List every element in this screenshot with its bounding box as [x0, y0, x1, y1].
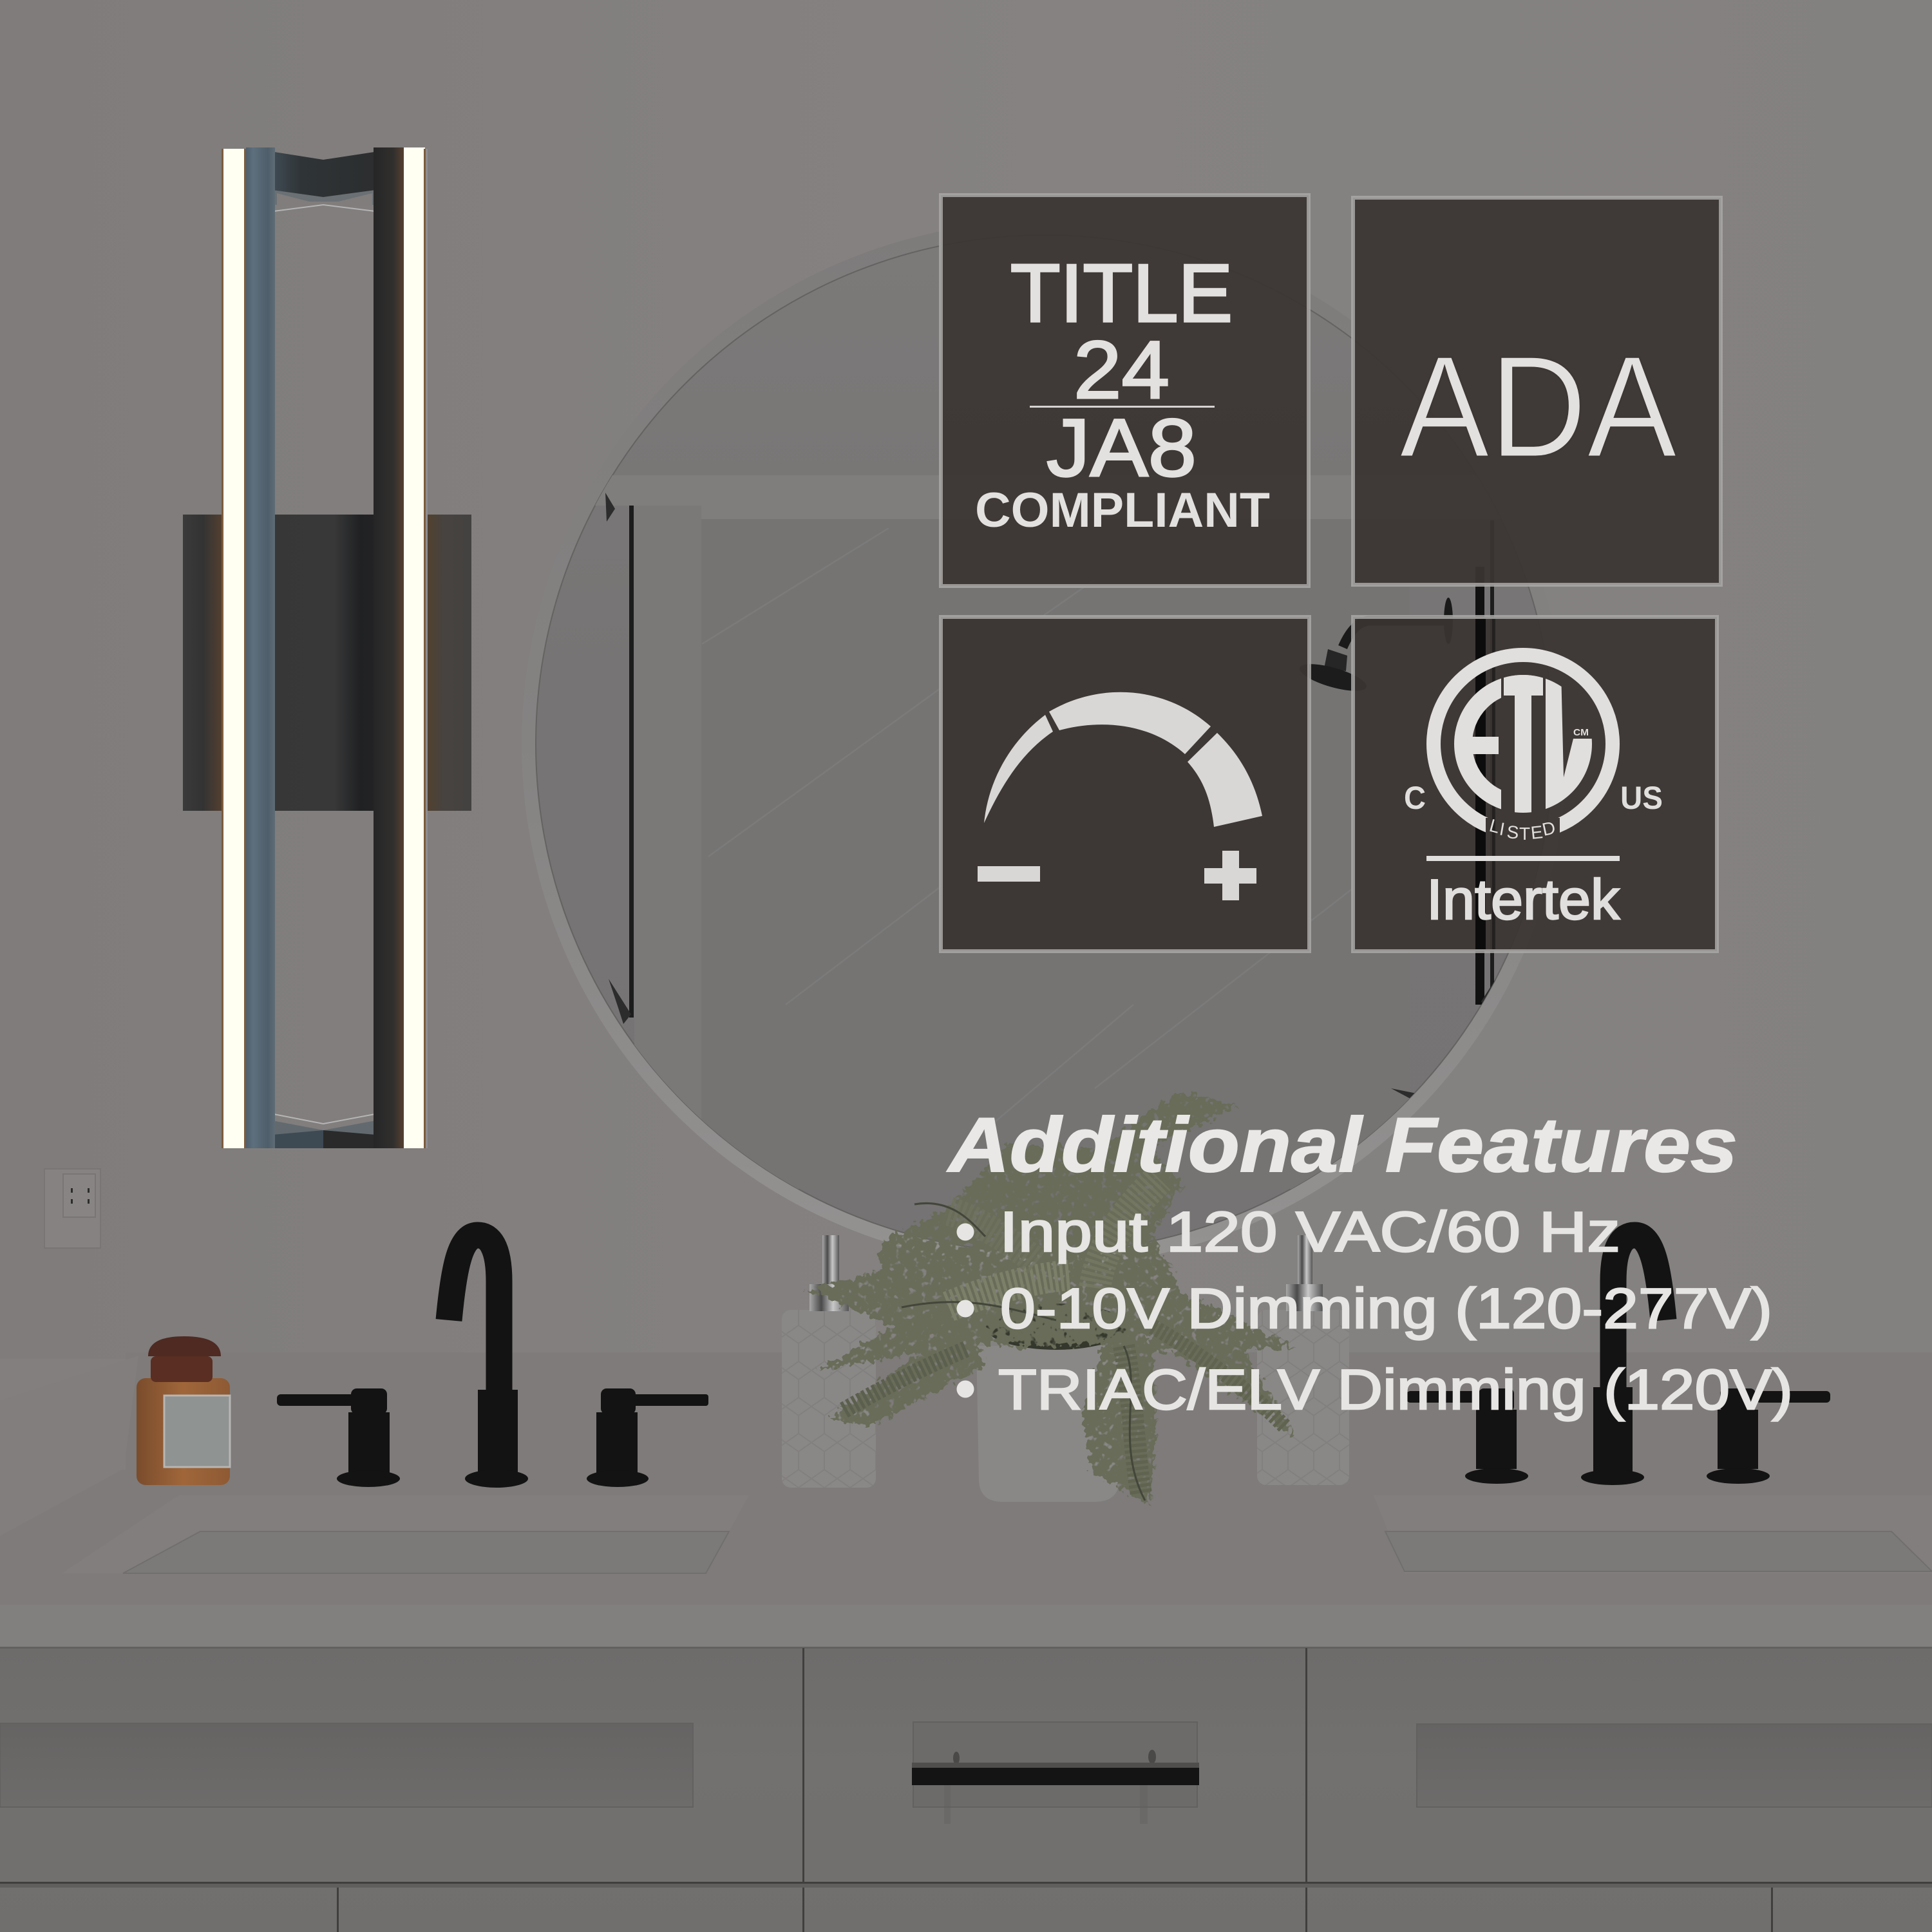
badge: dimmer — [941, 617, 1309, 951]
bullet two — [957, 1300, 974, 1318]
left light strip — [222, 149, 246, 1148]
blue left arm — [246, 147, 275, 1148]
countertop — [0, 1470, 1932, 1649]
LISTED: LISTED — [1487, 815, 1557, 844]
ETL letter T — [1504, 670, 1543, 815]
cabinet fronts — [0, 1648, 1932, 1932]
features list — [957, 1200, 1793, 1421]
ETL letter E — [1454, 679, 1501, 809]
badge: ADA — [1353, 198, 1721, 585]
minus — [978, 866, 1040, 882]
wall sconce product image — [183, 147, 471, 1148]
left return wall of backsplash — [0, 1356, 138, 1536]
plant pot — [976, 1346, 1121, 1502]
fern — [805, 1092, 1294, 1504]
c mark: C — [1404, 780, 1426, 816]
ETL outer ring — [1434, 655, 1613, 833]
soap dispenser right — [1257, 1235, 1349, 1485]
heading: additional features: Additional Features — [947, 1102, 1738, 1188]
mirror: shower niche — [701, 1098, 1409, 1189]
fern: dark crown — [985, 1303, 1127, 1350]
dimmer arc mid — [1049, 692, 1211, 754]
lower drawer shadow — [0, 1884, 1932, 1888]
badge: ADA: ADA — [1399, 325, 1677, 488]
feature: 0-10V: 0-10V Dimming (120-277V) — [1000, 1276, 1772, 1340]
right faucet — [1406, 1235, 1830, 1485]
left sink — [62, 1495, 749, 1573]
backsplash — [126, 1352, 1932, 1475]
backplate right — [427, 515, 471, 811]
fern: foliage mass — [805, 1092, 1294, 1504]
mirror: marble veins — [702, 528, 1352, 1146]
right sink — [1374, 1495, 1932, 1573]
CM mark: CM — [1573, 727, 1589, 738]
us mark: US — [1620, 780, 1663, 816]
wall outlet — [44, 1169, 100, 1248]
shower door seen through badge — [1475, 619, 1495, 949]
soap dispenser left — [782, 1235, 876, 1488]
dimmer arc high — [1188, 733, 1262, 827]
backplate left — [183, 515, 223, 811]
round mirror — [515, 228, 1571, 1260]
plus — [1204, 851, 1256, 900]
compliant: COMPLIANT — [975, 483, 1270, 538]
ETL letter V — [1546, 679, 1592, 809]
mirror: right shower door lines — [1475, 585, 1494, 1005]
title line: TITLE — [1010, 247, 1233, 339]
bullet one — [957, 1224, 974, 1240]
fern: stems — [902, 1203, 1145, 1501]
bullet three — [957, 1381, 974, 1397]
left recessed panel — [0, 1723, 693, 1807]
mirror: left wall strip — [634, 1043, 701, 1119]
JA8: JA8 — [1046, 402, 1197, 493]
right light strip — [404, 147, 428, 1148]
Intertek wordmark: Intertek — [1426, 867, 1620, 931]
mirror: shower head — [1309, 598, 1453, 690]
center recessed panel — [913, 1722, 1197, 1807]
mirror: ceiling soffit — [595, 475, 613, 506]
backplate center — [272, 515, 375, 811]
door gaps — [0, 1648, 1932, 1932]
badge: ETL listed — [1353, 617, 1717, 951]
right recessed panel — [1417, 1724, 1932, 1807]
dark right arm — [374, 147, 404, 1148]
bottom inner bracket — [246, 1114, 404, 1148]
feature: input: Input 120 VAC/60 Hz — [999, 1200, 1620, 1264]
mirror: left shower door line — [629, 506, 634, 1018]
top inner bracket — [246, 147, 404, 211]
badge: Title 24 JA8 compliant — [941, 195, 1309, 586]
wall background — [0, 0, 1932, 1359]
amber jar — [137, 1336, 230, 1485]
fern: brighter central fronds — [844, 1179, 1285, 1494]
left faucet — [277, 1235, 708, 1488]
dimmer arc low — [984, 715, 1053, 823]
24: 24 — [1074, 324, 1170, 415]
mirror: door corner brackets — [605, 493, 1521, 1109]
feature: TRIAC: TRIAC/ELV Dimming (120V) — [998, 1358, 1793, 1421]
drawer handle — [912, 1750, 1199, 1824]
